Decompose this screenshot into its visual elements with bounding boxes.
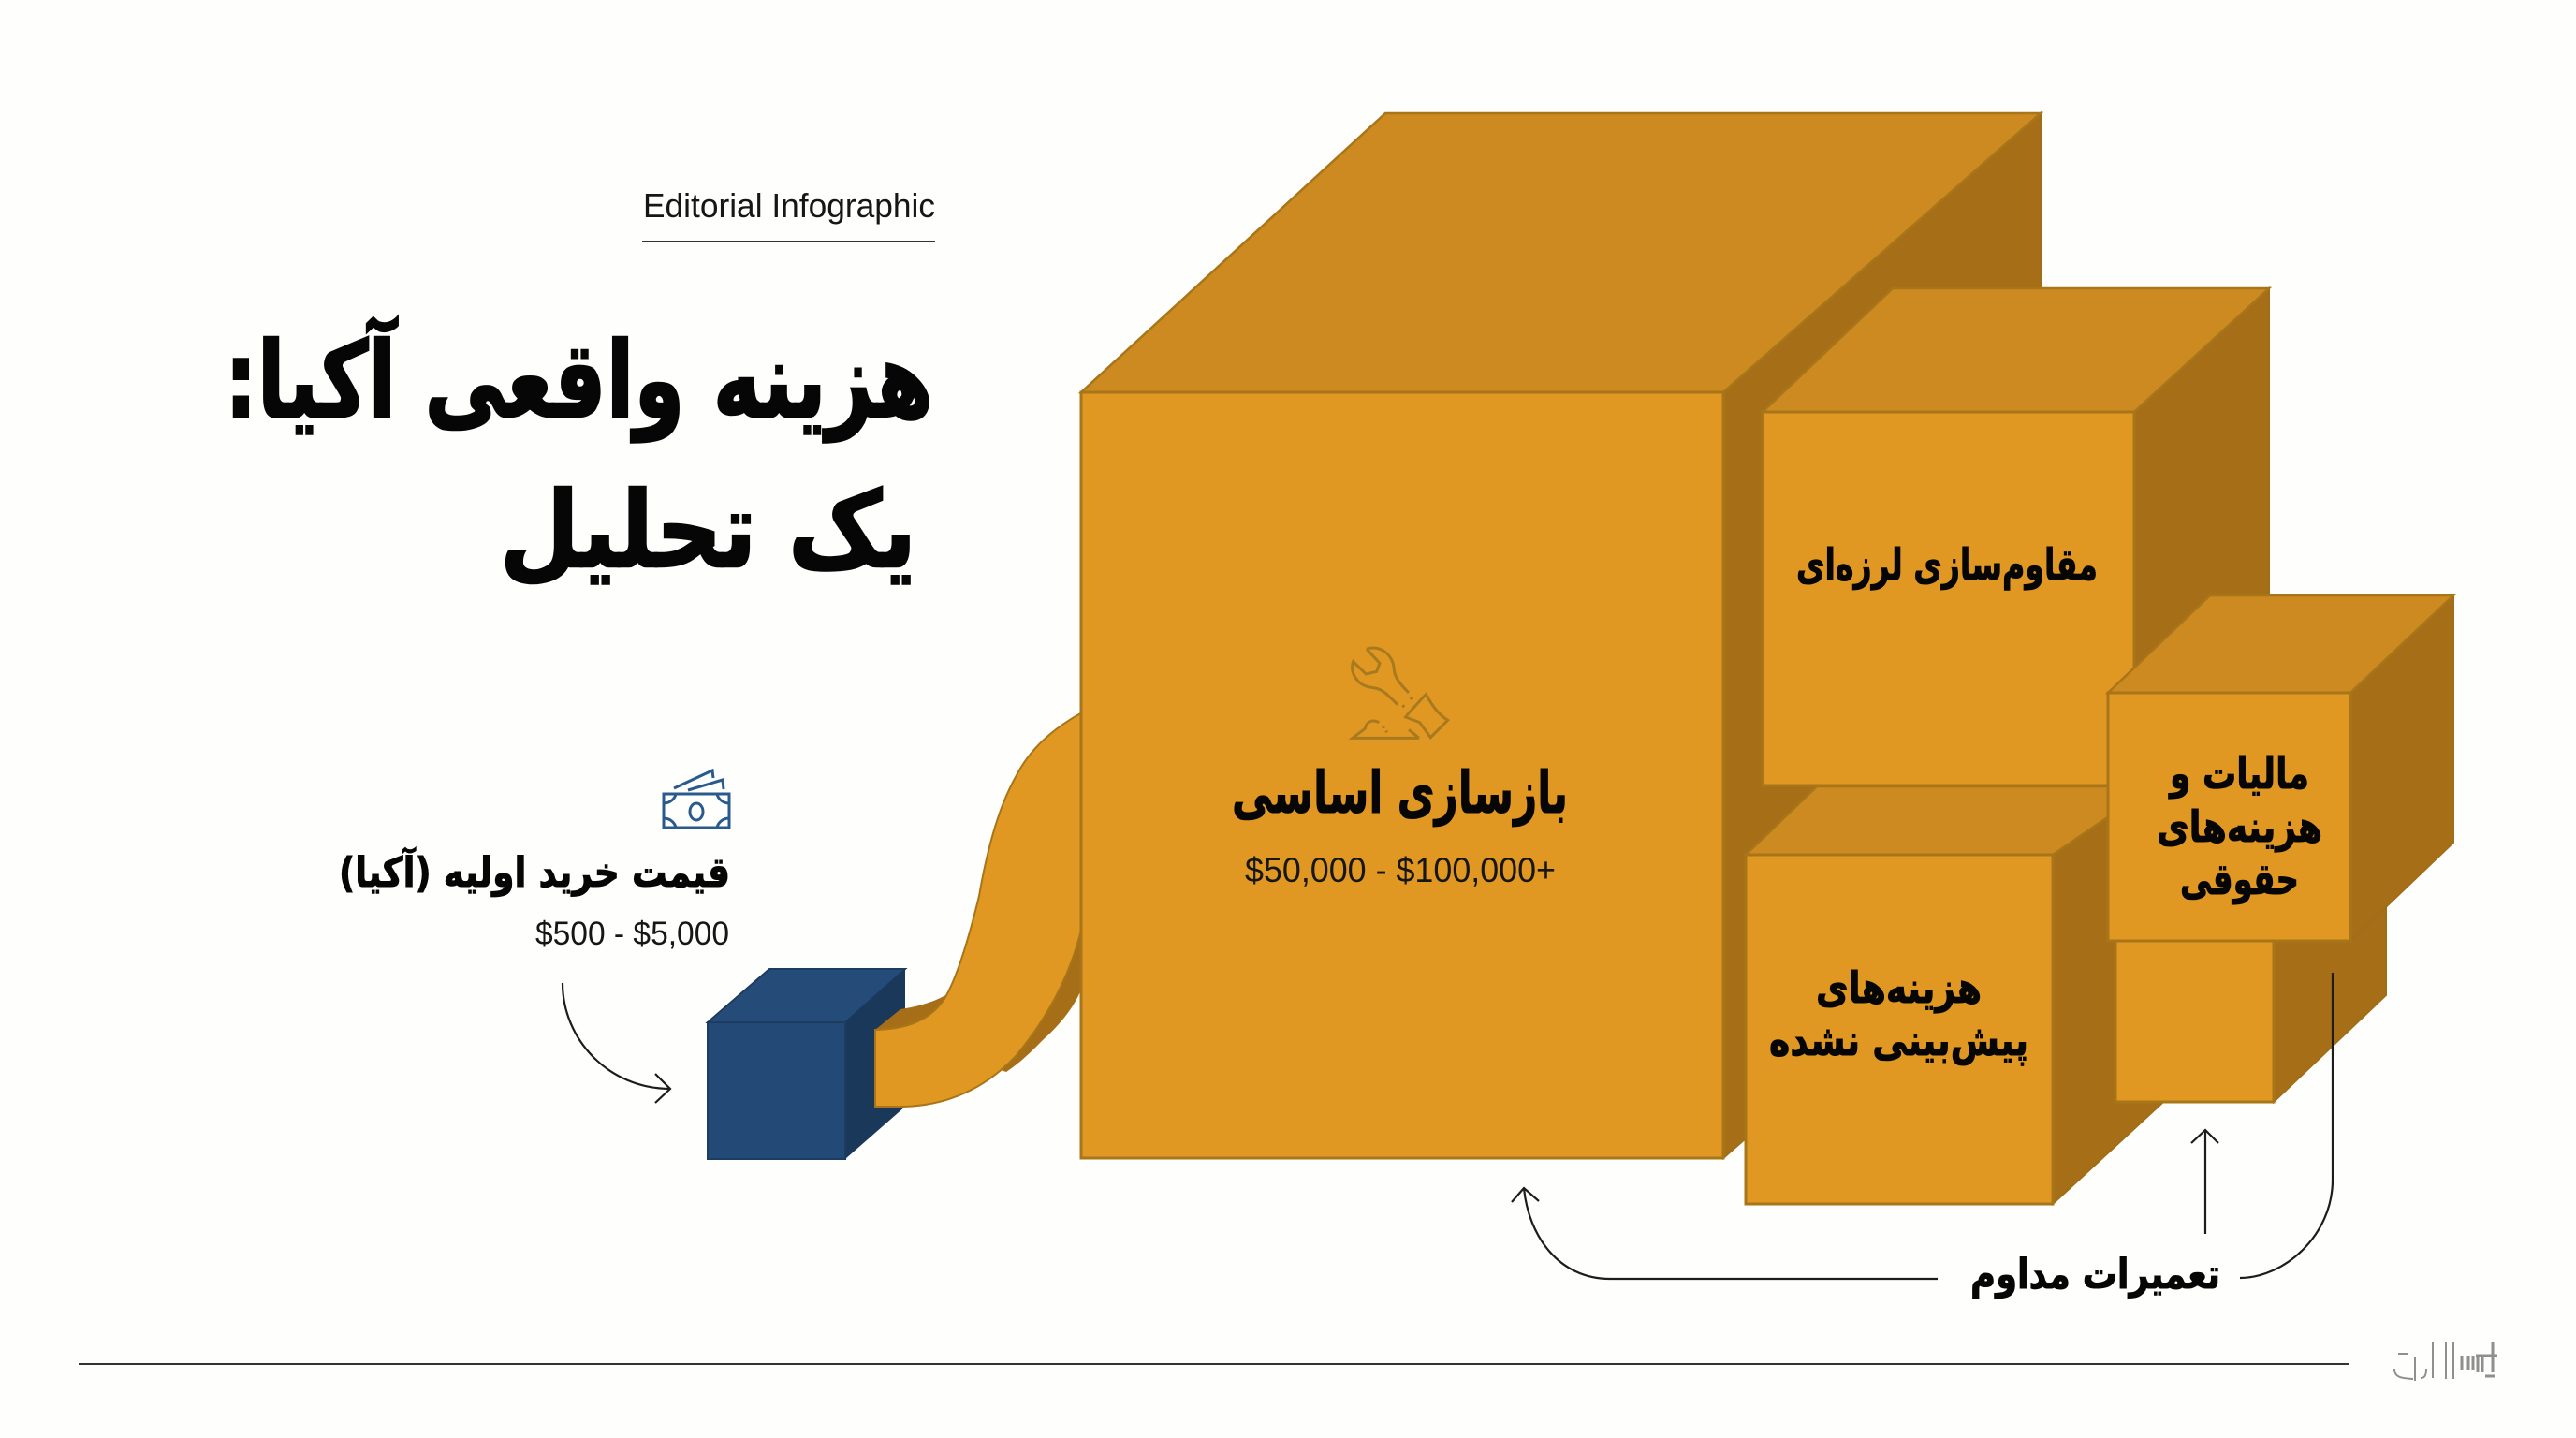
arrow: maintenance to small cube xyxy=(2191,1130,2218,1234)
cube: small maintenance xyxy=(2115,843,2386,1102)
label: taxes and legal: هزینه‌های xyxy=(2157,801,2322,852)
title: یک تحلیل xyxy=(500,470,916,592)
label: core rebuild: $50,000 - $100,000+ xyxy=(1245,851,1556,889)
title xyxy=(225,315,933,592)
label: taxes and legal: حقوقی xyxy=(2180,854,2299,904)
cube: unexpected costs xyxy=(1746,749,2162,1204)
title: هزینه واقعی آکیا: xyxy=(225,315,933,443)
label: unexpected costs xyxy=(1769,962,2028,1066)
label: taxes and legal: مالیات و xyxy=(2168,748,2309,799)
cube: seismic retrofit xyxy=(1763,288,2269,785)
label: purchase price xyxy=(339,846,730,952)
label: seismic retrofit: مقاوم‌سازی لرزه‌ای xyxy=(1796,539,2098,590)
ribbon: connection between cubes xyxy=(875,712,1084,1107)
label: purchase price: قیمت خرید اولیه (آکیا) xyxy=(339,846,730,897)
label: purchase price: $500 - $5,000 xyxy=(535,916,729,952)
icon: wrench and rubble xyxy=(1353,648,1448,738)
footer rule xyxy=(79,1363,2349,1365)
label: ongoing maintenance: تعمیرات مداوم xyxy=(1970,1251,2220,1299)
label: core rebuild xyxy=(1232,758,1568,889)
icon: money xyxy=(664,770,729,828)
logo xyxy=(2394,1342,2497,1381)
arrow: to blue cube xyxy=(563,983,670,1103)
cube: taxes and legal xyxy=(2108,595,2453,941)
cube: blue purchase price xyxy=(708,969,905,1159)
label: unexpected costs: پیش‌بینی نشده xyxy=(1769,1015,2028,1066)
label: core rebuild: بازسازی اساسی xyxy=(1232,758,1568,827)
label: unexpected costs: هزینه‌های xyxy=(1816,962,1982,1013)
cube: core rebuild xyxy=(1081,113,2041,1158)
eyebrow label: Editorial Infographic xyxy=(643,186,935,225)
arrow: maintenance to core rebuild xyxy=(1512,1188,1938,1279)
label: taxes and legal xyxy=(2157,748,2322,904)
arrow: maintenance to taxes cube xyxy=(2240,973,2333,1278)
